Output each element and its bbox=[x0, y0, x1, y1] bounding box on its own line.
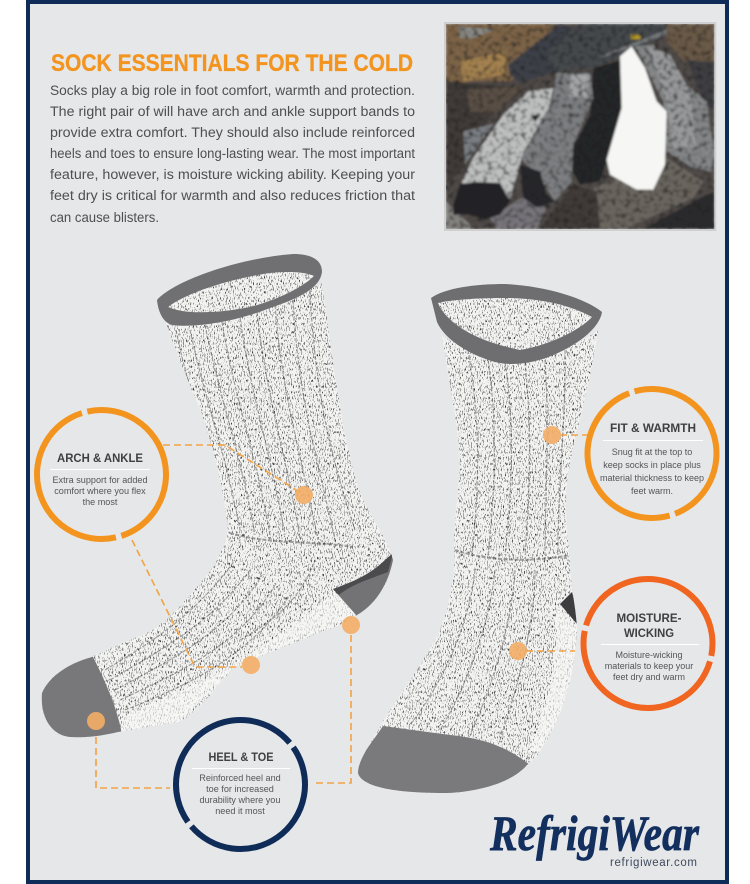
callout: fit and warmth: material thickness to keep bbox=[600, 473, 704, 483]
intro text block: The right pair of will have arch and ankle support bands to bbox=[50, 104, 415, 119]
callout: moisture-wicking: Moisture-wicking bbox=[615, 650, 683, 660]
right toe bbox=[352, 726, 530, 796]
intro text block: feature, however, is moisture wicking ability. Keeping your bbox=[50, 167, 416, 182]
boots bbox=[508, 25, 580, 83]
callout: arch and ankle: Extra support for added bbox=[52, 475, 148, 485]
callout: moisture-wicking bbox=[568, 563, 728, 724]
black sock bbox=[572, 60, 622, 185]
left sock illustration bbox=[30, 254, 400, 750]
callout: fit and warmth: Snug fit at the top to bbox=[612, 447, 692, 457]
callout: moisture-wicking: feet dry and warm bbox=[613, 672, 685, 682]
callout: heel and toe bbox=[151, 695, 330, 874]
callout: moisture-wicking: WICKING bbox=[624, 628, 674, 640]
callout: heel and toe: durability where you bbox=[200, 795, 280, 805]
callout: arch and ankle: ARCH & ANKLE bbox=[57, 453, 143, 465]
intro text block: provide extra comfort. They should also include reinforced bbox=[50, 125, 415, 140]
callout: heel and toe: toe for increased bbox=[206, 784, 274, 794]
callout: moisture-wicking: materials to keep your bbox=[605, 661, 693, 671]
photo: socks on rocks bbox=[444, 22, 716, 231]
intro text block: feet dry is critical for warmth and also reduces friction that bbox=[50, 188, 415, 203]
light sock bbox=[462, 88, 553, 200]
right sock body bbox=[358, 298, 598, 793]
callout: fit and warmth: keep socks in place plus bbox=[603, 460, 701, 470]
intro text block: can cause blisters. bbox=[50, 210, 159, 225]
connector lines bbox=[96, 435, 598, 788]
right sock illustration bbox=[358, 284, 602, 793]
right cuff bbox=[431, 284, 602, 364]
logo: RefrigiWear: refrigiwear.com bbox=[610, 857, 697, 869]
left sock body bbox=[30, 260, 400, 750]
white sock bbox=[607, 46, 667, 190]
callout: arch and ankle: the most bbox=[83, 497, 118, 507]
intro text block: heels and toes to ensure long-lasting wear. The most important bbox=[50, 146, 415, 161]
callout: arch and ankle bbox=[25, 398, 178, 551]
left cuff bbox=[157, 254, 322, 326]
mid grey sock bbox=[520, 73, 593, 201]
left toe bbox=[38, 655, 122, 740]
callout: heel and toe: need it most bbox=[215, 806, 265, 816]
intro text block bbox=[50, 83, 416, 225]
callout: moisture-wicking: MOISTURE- bbox=[616, 613, 682, 625]
callout: fit and warmth bbox=[573, 374, 731, 533]
callout: heel and toe: Reinforced heel and bbox=[199, 773, 281, 783]
callout: heel and toe: HEEL & TOE bbox=[208, 752, 274, 764]
photo texture bbox=[446, 24, 714, 229]
left heel bbox=[333, 555, 393, 616]
callout: fit and warmth: FIT & WARMTH bbox=[610, 423, 696, 435]
marker dots bbox=[87, 426, 561, 730]
callout: fit and warmth: feet warm. bbox=[631, 486, 673, 496]
intro text block: Socks play a big role in foot comfort, warmth and protection. bbox=[50, 83, 415, 98]
callout: arch and ankle: comfort where you flex bbox=[54, 486, 146, 496]
title: SOCK ESSENTIALS FOR THE COLD bbox=[51, 50, 413, 77]
grey sock far right bbox=[635, 45, 714, 171]
logo: RefrigiWear: RefrigiWear bbox=[489, 805, 699, 861]
